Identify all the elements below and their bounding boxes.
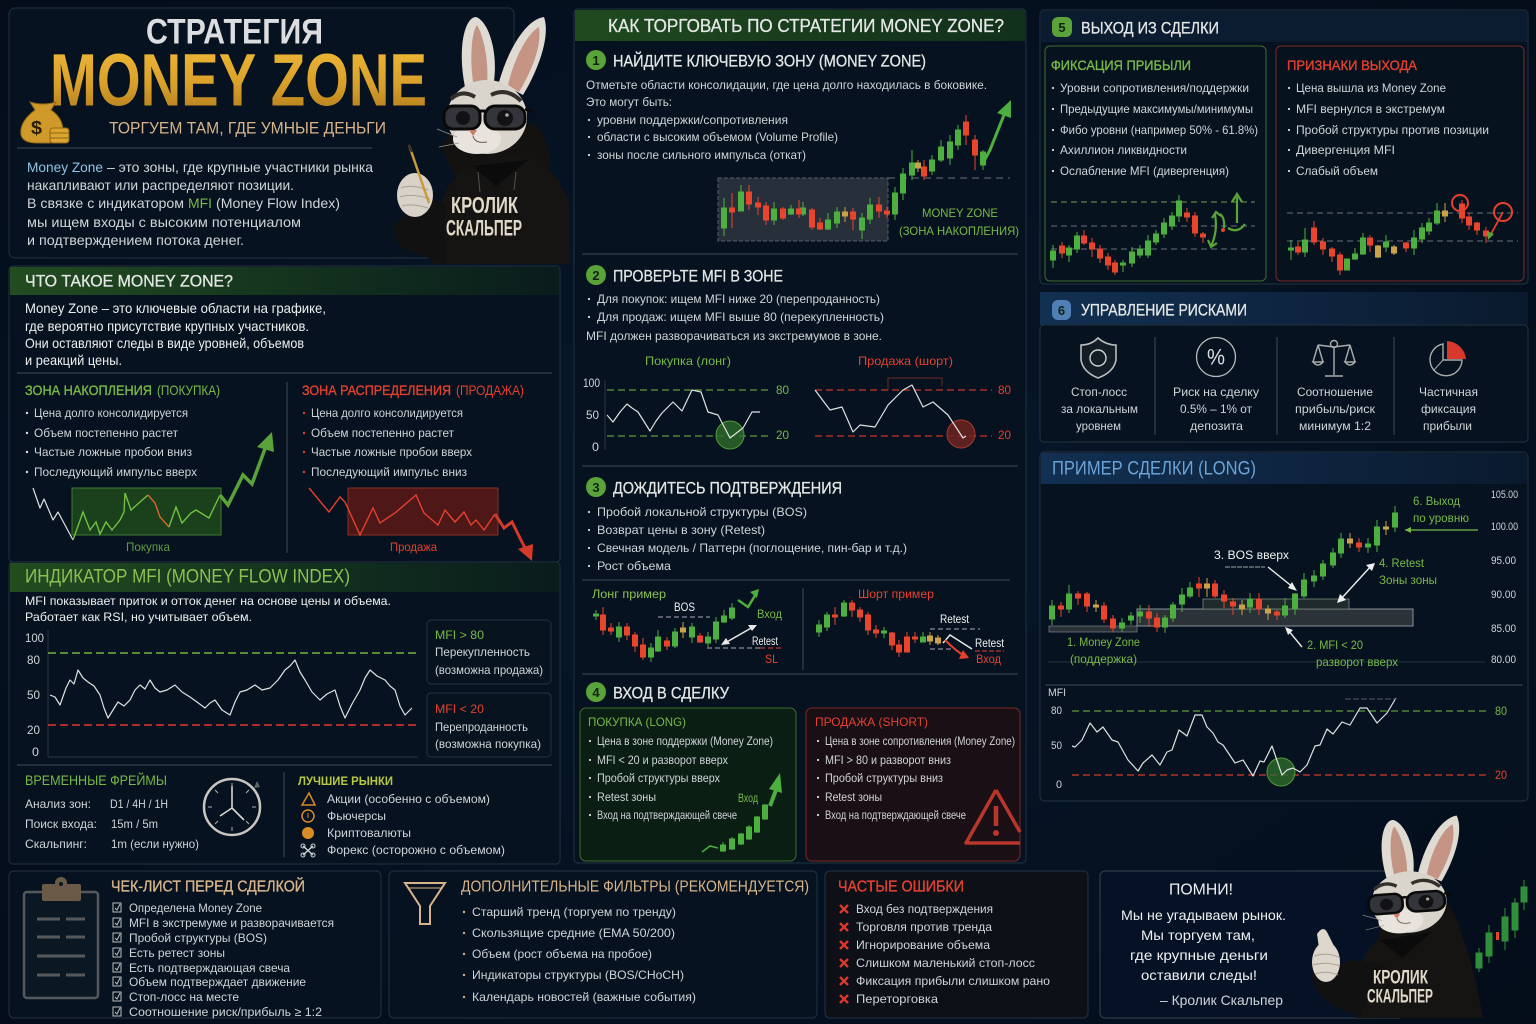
heading: risk: 6: [1058, 303, 1065, 318]
panel: short entry: ПРОДАЖА (SHORT): [815, 715, 928, 729]
chart: money zone candles: [718, 100, 1019, 241]
chart: long example: Лонг пример: [592, 587, 666, 601]
panel: checklist: [9, 871, 381, 1019]
callout: MFI below 20: [427, 693, 551, 757]
chart: MFI short: 20: [998, 428, 1011, 442]
filters list: Объем (рост объема на пробое): [472, 947, 652, 961]
distribution zone: Последующий импульс вниз: [311, 465, 467, 479]
timeframes: [25, 771, 260, 851]
chart: MFI short: 80: [998, 383, 1011, 397]
mistakes list: Вход без подтверждения: [856, 902, 993, 916]
quote: Мы торгуем там,: [1141, 927, 1255, 943]
step 1: [586, 50, 1019, 241]
chart: price candles: 80.00: [1491, 654, 1516, 666]
panel: long entry: Цена в зоне поддержки (Money Zone): [597, 734, 773, 748]
panel: take profit: Предыдущие максимумы/минимумы: [1060, 102, 1253, 116]
intro text: – это зоны, где крупные участники рынка: [107, 159, 373, 175]
intro text: MFI: [188, 195, 212, 211]
checklist items: Определена Money Zone: [129, 901, 262, 915]
chart: entry rising candles: Вход: [738, 791, 758, 805]
chart: long example: Вход: [757, 607, 782, 621]
timeframes: D1 / 4H / 1H: [110, 797, 168, 811]
mistakes list: Переторговка: [856, 992, 938, 1006]
chart: long example: [592, 587, 784, 666]
definition text: Они оставляют следы в виде уровней, объемов: [25, 335, 304, 351]
MFI description: Работает как RSI, но учитывает объем.: [25, 610, 252, 624]
best markets: Акции (особенно с объемом): [327, 792, 490, 806]
illustration: rabbit with pencil: КРОЛИК: [451, 192, 519, 218]
checklist items: Есть подтверждающая свеча: [129, 961, 290, 975]
panel: risk management: [1040, 292, 1528, 442]
step 4: ВХОД В СДЕЛКУ: [613, 684, 729, 702]
chart: short example: Вход: [976, 652, 1001, 666]
chart: take profit candles: [1050, 194, 1255, 275]
panel: common mistakes: [825, 871, 1088, 1018]
panel: exit signs: Дивергенция MFI: [1296, 143, 1395, 157]
item: risk reward: минимум 1:2: [1299, 419, 1371, 433]
icon: money bag: [21, 102, 69, 143]
panel: exit signs: [1276, 46, 1524, 281]
chart: MFI short: Продажа (шорт): [858, 354, 953, 368]
heading: risk: [1052, 300, 1247, 320]
filters list: [464, 905, 696, 1004]
step 2: Для покупок: ищем MFI ниже 20 (перепроданность): [597, 292, 880, 306]
item: risk per trade: Риск на сделку: [1173, 385, 1259, 399]
chart: MFI line: 80: [27, 653, 40, 667]
chart: price candles: 100.00: [1491, 521, 1518, 533]
chart: money zone candles: MONEY ZONE: [922, 206, 998, 220]
callout: MFI below 20: MFI < 20: [435, 702, 484, 716]
timeframes: Скальпинг:: [25, 837, 87, 851]
illustration: rabbit thumbs up: [1311, 815, 1483, 1018]
intro text: [27, 159, 373, 248]
panel: exit signs: Цена вышла из Money Zone: [1296, 81, 1446, 95]
illustration: rabbit thumbs up: СКАЛЬПЕР: [1367, 986, 1433, 1008]
intro text: (Money Flow Index): [216, 195, 340, 211]
step 3: Рост объема: [597, 559, 671, 573]
callout: MFI below 20: Перепроданность: [435, 720, 528, 734]
checklist items: Соотношение риск/прибыль ≥ 1:2: [129, 1005, 322, 1019]
title: strategy: СТРАТЕГИЯ: [146, 12, 323, 52]
callout: MFI below 20: (возможна покупка): [435, 737, 541, 751]
quote: оставили следы!: [1141, 967, 1257, 983]
panel: additional filters: [389, 871, 817, 1018]
chart: entry rising candles: [702, 773, 782, 852]
definition text: и реакций цены.: [25, 352, 122, 368]
callout: MFI above 80: (возможна продажа): [435, 663, 543, 677]
panel: long entry: MFI < 20 и разворот вверх: [597, 753, 728, 767]
mistakes list: Фиксация прибыли слишком рано: [856, 974, 1050, 988]
timeframes: Поиск входа:: [25, 817, 97, 831]
chart: short example: Шорт пример: [858, 587, 934, 601]
intro text: и подтверждением потока денег.: [27, 232, 244, 248]
chart: exit signs candles: [1287, 195, 1518, 275]
item: stop loss: Стоп-лосс: [1071, 385, 1127, 399]
checklist items: Есть ретест зоны: [129, 946, 225, 960]
panel: short entry: Цена в зоне сопротивления (Money Zone): [825, 734, 1015, 748]
illustration: rabbit thumbs up: КРОЛИК: [1373, 968, 1428, 988]
step 3: [582, 477, 1010, 670]
icon: money bag: $: [31, 118, 42, 138]
chart: example MFI: 80: [1495, 704, 1507, 718]
panel: remember: [1100, 871, 1400, 1018]
chart: price candles: 90.00: [1491, 589, 1516, 601]
chart: short example: Retest: [975, 636, 1005, 650]
panel: what is money zone: [9, 266, 560, 562]
item: risk per trade: депозита: [1190, 419, 1243, 433]
definition text: [25, 300, 326, 368]
chart: short example: [816, 587, 1005, 666]
chart: distribution: [309, 488, 533, 561]
chart: distribution: Продажа: [390, 540, 437, 554]
icons: markets: [301, 793, 315, 857]
mistakes list: [840, 902, 1050, 1006]
chart: price candles: 2. MFI < 20: [1307, 638, 1363, 652]
panel: exit signs: MFI вернулся в экстремум: [1296, 102, 1445, 116]
title: money zone: MONEY ZONE: [50, 38, 427, 122]
mistakes list: Торговля против тренда: [856, 920, 992, 934]
step 4: [580, 682, 1020, 861]
distribution zone: ЗОНА РАСПРЕДЕЛЕНИЯ: [302, 382, 451, 398]
step 1: 1: [592, 53, 600, 68]
distribution zone: Цена долго консолидируется: [311, 406, 463, 420]
item: stop loss: за локальным: [1061, 402, 1138, 416]
chart: example MFI: 0: [1056, 779, 1062, 791]
chart: price candles: 85.00: [1491, 623, 1516, 635]
MFI description: [25, 594, 391, 624]
chart: accumulation: [33, 432, 274, 554]
item: risk reward: Соотношение: [1297, 385, 1373, 399]
icon: funnel: [405, 883, 445, 924]
accumulation zone: Цена долго консолидируется: [34, 406, 188, 420]
chart: accumulation: Покупка: [126, 540, 170, 554]
accumulation zone: Последующий импульс вверх: [34, 465, 197, 479]
chart: MFI short: [815, 354, 1011, 448]
best markets: Форекс (осторожно с объемом): [327, 843, 505, 857]
item: risk per trade: %: [1207, 344, 1225, 370]
chart: price candles: 3. BOS вверх: [1214, 548, 1289, 562]
intro text: Money Zone: [27, 159, 103, 175]
intro text: мы ищем входы с высоким потенциалом: [27, 214, 301, 230]
step 3: ДОЖДИТЕСЬ ПОДТВЕРЖДЕНИЯ: [613, 478, 842, 498]
quote: Мы не угадываем рынок.: [1121, 907, 1286, 923]
icon: clipboard: [24, 877, 98, 998]
step 3: Пробой локальной структуры (BOS): [597, 505, 807, 519]
step 2: Для продаж: ищем MFI выше 80 (перекупленность): [597, 310, 884, 324]
definition text: где вероятно присутствие крупных участников.: [25, 318, 309, 334]
panel: long entry: Вход на подтверждающей свече: [597, 808, 737, 822]
chart: MFI long: 80: [776, 383, 789, 397]
chart: example MFI: [1048, 687, 1507, 791]
icon: clock: [204, 779, 260, 835]
panel: take profit: Уровни сопротивления/поддержки: [1060, 81, 1249, 95]
panel: take profit: ФИКСАЦИЯ ПРИБЫЛИ: [1051, 57, 1191, 73]
panel: short entry: Пробой структуры вниз: [825, 771, 943, 785]
checklist items: [113, 901, 334, 1019]
best markets: Фьючерсы: [327, 809, 386, 823]
best markets: ЛУЧШИЕ РЫНКИ: [298, 774, 393, 788]
intro text: накапливают или распределяют позиции.: [27, 177, 294, 193]
item: stop loss: уровнем: [1076, 419, 1121, 433]
item: risk per trade: 0.5% – 1% от: [1180, 402, 1252, 416]
panel: trade example: [1040, 452, 1528, 801]
heading: checklist: ЧЕК-ЛИСТ ПЕРЕД СДЕЛКОЙ: [111, 876, 305, 896]
item: risk per trade: [1173, 338, 1259, 433]
chart: MFI long: [583, 354, 789, 454]
checklist items: MFI в экстремуме и разворачивается: [129, 916, 334, 930]
panel: long entry: Retest зоны: [597, 790, 656, 804]
chart: example MFI: 50: [1051, 740, 1062, 752]
best markets: Криптовалюты: [327, 826, 411, 840]
chart: MFI long: 100: [583, 376, 600, 390]
panel: MFI indicator: [9, 562, 560, 864]
step 1: НАЙДИТЕ КЛЮЧЕВУЮ ЗОНУ (MONEY ZONE): [613, 52, 926, 70]
chart: example MFI: 20: [1495, 768, 1507, 782]
chart: example MFI: MFI: [1048, 687, 1066, 699]
step 3: 3: [592, 480, 600, 495]
chart: growth candles: [1476, 880, 1527, 972]
panel: short entry: Retest зоны: [825, 790, 882, 804]
chart: MFI line: 100: [25, 631, 44, 645]
heading: risk: УПРАВЛЕНИЕ РИСКАМИ: [1081, 300, 1247, 320]
checklist items: Объем подтверждает движение: [129, 975, 306, 989]
distribution zone: (ПРОДАЖА): [456, 382, 524, 398]
heading: remember: ПОМНИ!: [1169, 882, 1233, 898]
chart: long example: BOS: [674, 600, 695, 614]
checklist items: Стоп-лосс на месте: [129, 990, 239, 1004]
item: stop loss: [1061, 338, 1138, 433]
panel: short entry: Вход на подтверждающей свече: [825, 808, 966, 822]
step 1: Это могут быть:: [586, 95, 672, 109]
callout: MFI above 80: MFI > 80: [435, 628, 484, 642]
mistakes list: Игнорирование объема: [856, 938, 990, 952]
item: partial profit: [1419, 341, 1478, 433]
panel: exit from trade: [1040, 10, 1528, 284]
step 2: MFI должен разворачиваться из экстремумов в зоне.: [586, 329, 882, 343]
step 1: области с высоким объемом (Volume Profile): [597, 130, 838, 144]
panel: exit signs: ПРИЗНАКИ ВЫХОДА: [1287, 57, 1418, 73]
chart: price candles: [1048, 489, 1518, 669]
step 1: Отметьте области консолидации, где цена долго находилась в боковике.: [586, 78, 987, 92]
chart: price candles: 1. Money Zone: [1067, 635, 1140, 649]
quote: где крупные деньги: [1130, 947, 1268, 963]
illustration: rabbit with pencil: СКАЛЬПЕР: [446, 216, 522, 240]
chart: MFI line: 50: [27, 688, 40, 702]
mistakes list: Слишком маленький стоп-лосс: [856, 956, 1035, 970]
chart: price candles: 95.00: [1491, 555, 1516, 567]
heading: MFI: ИНДИКАТОР MFI (MONEY FLOW INDEX): [25, 566, 350, 588]
chart: example MFI: 80: [1051, 705, 1062, 717]
heading: example: ПРИМЕР СДЕЛКИ (LONG): [1052, 458, 1256, 480]
chart: price candles: (поддержка): [1070, 652, 1137, 666]
heading: mistakes: ЧАСТЫЕ ОШИБКИ: [838, 878, 964, 896]
item: partial profit: фиксация: [1421, 402, 1476, 416]
callout: MFI above 80: Перекупленность: [435, 645, 530, 659]
panel: take profit: [1045, 46, 1266, 281]
illustration: rabbit with pencil: [393, 17, 570, 264]
quote: – Кролик Скальпер: [1160, 992, 1283, 1008]
filters list: Скользящие средние (EMA 50/200): [472, 926, 675, 940]
chart: price candles: Зоны зоны: [1379, 573, 1437, 587]
chart: money zone candles: (ЗОНА НАКОПЛЕНИЯ): [899, 224, 1019, 238]
item: partial profit: прибыли: [1423, 419, 1472, 433]
heading: exit: [1052, 17, 1219, 38]
step 4: 4: [592, 685, 600, 700]
filters list: Календарь новостей (важные события): [472, 990, 696, 1004]
accumulation zone: Частые ложные пробои вниз: [34, 445, 192, 459]
chart: price candles: разворот вверх: [1316, 655, 1398, 669]
heading: how to trade: КАК ТОРГОВАТЬ ПО СТРАТЕГИИ MONEY ZONE?: [608, 16, 1004, 36]
definition text: Money Zone – это ключевые области на графике,: [25, 300, 326, 316]
chart: price candles: 6. Выход: [1413, 494, 1460, 508]
chart: MFI line: 20: [27, 723, 40, 737]
panel: exit signs: Слабый объем: [1296, 164, 1378, 178]
panel: long entry: [580, 708, 796, 861]
item: partial profit: Частичная: [1419, 385, 1478, 399]
panel: exit signs: Пробой структуры против позиции: [1296, 123, 1489, 137]
chart: MFI long: 50: [586, 408, 599, 422]
chart: MFI long: Покупка (лонг): [645, 354, 731, 368]
timeframes: ВРЕМЕННЫЕ ФРЕЙМЫ: [25, 771, 167, 788]
panel: hero: [9, 8, 514, 258]
step 3: Возврат цены в зону (Retest): [597, 523, 765, 537]
panel: how to trade: [574, 9, 1026, 863]
heading: what is money zone: ЧТО ТАКОЕ MONEY ZONE?: [25, 272, 233, 290]
panel: take profit: Фибо уровни (например 50% - 61.8%): [1060, 123, 1258, 137]
timeframes: 15m / 5m: [111, 817, 158, 831]
panel: long entry: ПОКУПКА (LONG): [588, 715, 686, 729]
accumulation zone: ЗОНА НАКОПЛЕНИЯ: [25, 382, 152, 398]
quote: [1121, 907, 1286, 1008]
best markets: [298, 774, 505, 857]
heading: exit: ВЫХОД ИЗ СДЕЛКИ: [1081, 18, 1219, 38]
step 3: Свечная модель / Паттерн (поглощение, пин-бар и т.д.): [597, 541, 907, 555]
chart: price candles: по уровню: [1413, 511, 1469, 525]
panel: long entry: Пробой структуры вверх: [597, 771, 720, 785]
panel: short entry: MFI > 80 и разворот вниз: [825, 753, 951, 767]
chart: MFI line: 0: [32, 745, 39, 759]
chart: price candles: 4. Retest: [1379, 556, 1425, 570]
panel: take profit: Ахиллион ликвидности: [1060, 143, 1187, 157]
step 2: [583, 265, 1011, 454]
panel: short entry: [806, 708, 1020, 861]
heading: filters: ДОПОЛНИТЕЛЬНЫЕ ФИЛЬТРЫ (РЕКОМЕНДУЕТСЯ): [461, 878, 809, 896]
chart: short example: Retest: [940, 612, 970, 626]
step 1: зоны после сильного импульса (откат): [597, 148, 806, 162]
step 2: 2: [592, 268, 600, 283]
chart: long example: Retest: [752, 634, 778, 648]
filters list: Старший тренд (торгуем по тренду): [472, 905, 676, 919]
icon: warning triangle: [966, 790, 1020, 843]
heading: exit: 5: [1058, 20, 1066, 35]
MFI description: MFI показывает приток и отток денег на основе цены и объема.: [25, 594, 391, 608]
chart: MFI long: 0: [592, 440, 599, 454]
chart: price candles: 105.00: [1491, 489, 1518, 501]
checklist items: Пробой структуры (BOS): [129, 931, 267, 945]
callout: MFI above 80: [427, 620, 551, 684]
distribution zone: [302, 382, 533, 561]
chart: MFI long: 20: [776, 428, 789, 442]
chart: long example: SL: [765, 652, 778, 666]
step 1: уровни поддержки/сопротивления: [597, 113, 788, 127]
accumulation zone: [25, 382, 274, 554]
chart: MFI line: [25, 630, 418, 759]
step 2: ПРОВЕРЬТЕ MFI В ЗОНЕ: [613, 266, 783, 286]
item: risk reward: прибыль/риск: [1295, 402, 1376, 416]
intro text: В связке с индикатором: [27, 195, 184, 211]
item: risk reward: [1295, 340, 1376, 433]
subtitle: ТОРГУЕМ ТАМ, ГДЕ УМНЫЕ ДЕНЬГИ: [109, 118, 386, 138]
timeframes: Анализ зон:: [25, 797, 91, 811]
accumulation zone: Объем постепенно растет: [34, 426, 178, 440]
filters list: Индикаторы структуры (BOS/CHoCH): [472, 968, 684, 982]
panel: take profit: Ослабление MFI (дивергенция): [1060, 164, 1229, 178]
timeframes: 1m (если нужно): [111, 837, 199, 851]
distribution zone: Частые ложные пробои вверх: [311, 445, 472, 459]
distribution zone: Объем постепенно растет: [311, 426, 454, 440]
accumulation zone: (ПОКУПКА): [157, 382, 220, 398]
